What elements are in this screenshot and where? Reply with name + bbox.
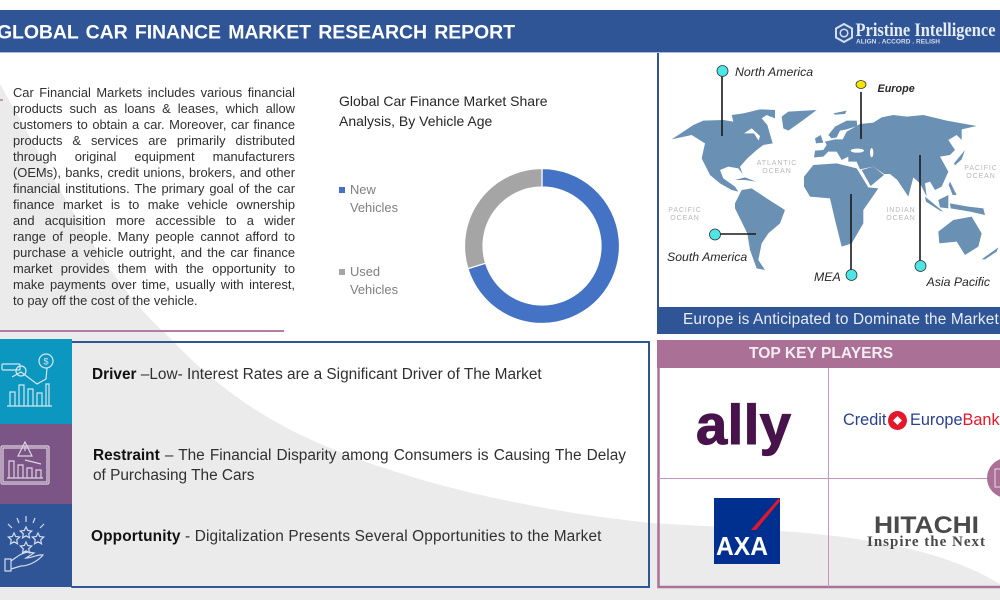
red diamond mark <box>888 411 907 430</box>
chart legend <box>339 182 398 297</box>
legend: used vehicles: Vehicles <box>350 282 398 297</box>
description text: products such as loans & leases, which allow <box>13 101 295 116</box>
restraint text: Restraint – The Financial Disparity among Consumers is Causing The Delay <box>93 447 626 464</box>
legend: new vehicles: Vehicles <box>350 200 398 215</box>
description text: market provides them with the opportunity to <box>13 261 295 276</box>
ocean labels: PACIFIC <box>668 207 702 214</box>
restraint icon tile <box>0 424 72 504</box>
description text: financial institutions. The primary goal of the car <box>13 181 295 196</box>
panel: top key players <box>657 340 1000 588</box>
region labels: Europe <box>878 83 915 95</box>
restraint text <box>93 447 626 484</box>
ocean labels: OCEAN <box>670 215 700 222</box>
description text: purchase a vehicle outright, and the car finance <box>13 245 295 260</box>
ocean labels <box>668 160 998 222</box>
ocean labels: ATLANTIC <box>757 160 797 167</box>
description text: and acquisition more accessible to a wider <box>13 213 295 228</box>
logo: axa: AXA <box>716 531 768 561</box>
player grid <box>657 368 1000 588</box>
region markers <box>720 72 920 272</box>
opportunity icon tile <box>0 504 72 587</box>
legend: new vehicles: New <box>350 182 376 197</box>
description text: products & services are primarily distributed <box>13 133 295 148</box>
donut chart <box>465 169 619 323</box>
legend: used vehicles <box>339 264 398 297</box>
opportunity text: Opportunity - Digitalization Presents Several Opportunities to the Market <box>91 528 602 545</box>
players heading: TOP KEY PLAYERS <box>749 345 893 362</box>
players heading <box>657 340 1000 368</box>
map caption bar <box>657 307 1000 334</box>
driver text: Driver –Low- Interest Rates are a Significant Driver of The Market <box>92 366 542 383</box>
description text: range of people. Many people cannot afford to <box>13 229 295 244</box>
description text <box>13 85 295 308</box>
region labels <box>667 65 991 289</box>
legend: new vehicles <box>339 182 398 215</box>
logo: hitachi: HITACHI <box>874 512 979 539</box>
logo: credit europe bank: EuropeBank <box>910 411 1000 429</box>
chart title <box>339 93 548 129</box>
ocean labels: OCEAN <box>886 215 916 222</box>
description text: make payments over time, usually with interest, <box>13 277 295 292</box>
ocean labels: OCEAN <box>762 168 792 175</box>
logo: hitachi <box>867 512 985 550</box>
description text: (OEMs), banks, credit unions, brokers, and other <box>13 165 295 180</box>
description text: to pay off the cost of the vehicle. <box>13 293 198 308</box>
divider line <box>0 330 284 332</box>
description text: Car Financial Markets includes various financial <box>13 85 295 100</box>
driver icon tile: $ <box>44 356 49 366</box>
logo: credit europe bank: Credit <box>843 411 886 429</box>
logo: ally: ally <box>696 393 791 456</box>
ocean labels: INDIAN <box>886 207 916 214</box>
description text: customers to obtain a car. Moreover, car finance <box>13 117 295 132</box>
chart title: Global Car Finance Market Share <box>339 93 548 109</box>
map caption bar: Europe is Anticipated to Dominate the Market <box>683 311 999 328</box>
region labels: Asia Pacific <box>926 275 991 289</box>
brand logo: ALIGN . ACCORD . RELISH <box>856 38 940 46</box>
world map <box>667 65 998 289</box>
ocean labels: OCEAN <box>966 173 996 180</box>
restraint text: of Purchasing The Cars <box>93 466 254 484</box>
description text: finance market is to make vehicle ownership <box>13 197 295 212</box>
floating badge <box>987 459 1000 497</box>
logo: hitachi: Inspire the Next <box>867 534 985 550</box>
region labels: MEA <box>814 270 841 284</box>
region labels: South America <box>667 250 747 264</box>
chart title: Analysis, By Vehicle Age <box>339 113 492 129</box>
logo: axa <box>714 498 780 564</box>
driver icon tile <box>0 339 72 424</box>
logo: credit europe bank <box>843 411 1000 430</box>
legend: used vehicles: Used <box>350 264 380 279</box>
panel: market dynamics <box>0 339 650 588</box>
brand logo <box>835 21 996 46</box>
content frame <box>71 341 650 588</box>
region labels: North America <box>735 65 813 79</box>
header bar <box>0 10 1000 53</box>
title: GLOBAL CAR FINANCE MARKET RESEARCH REPORT <box>0 22 515 44</box>
ocean labels: PACIFIC <box>964 165 998 172</box>
description text: through original equipment manufacturers <box>13 149 295 164</box>
panel: regional map <box>657 53 1000 334</box>
